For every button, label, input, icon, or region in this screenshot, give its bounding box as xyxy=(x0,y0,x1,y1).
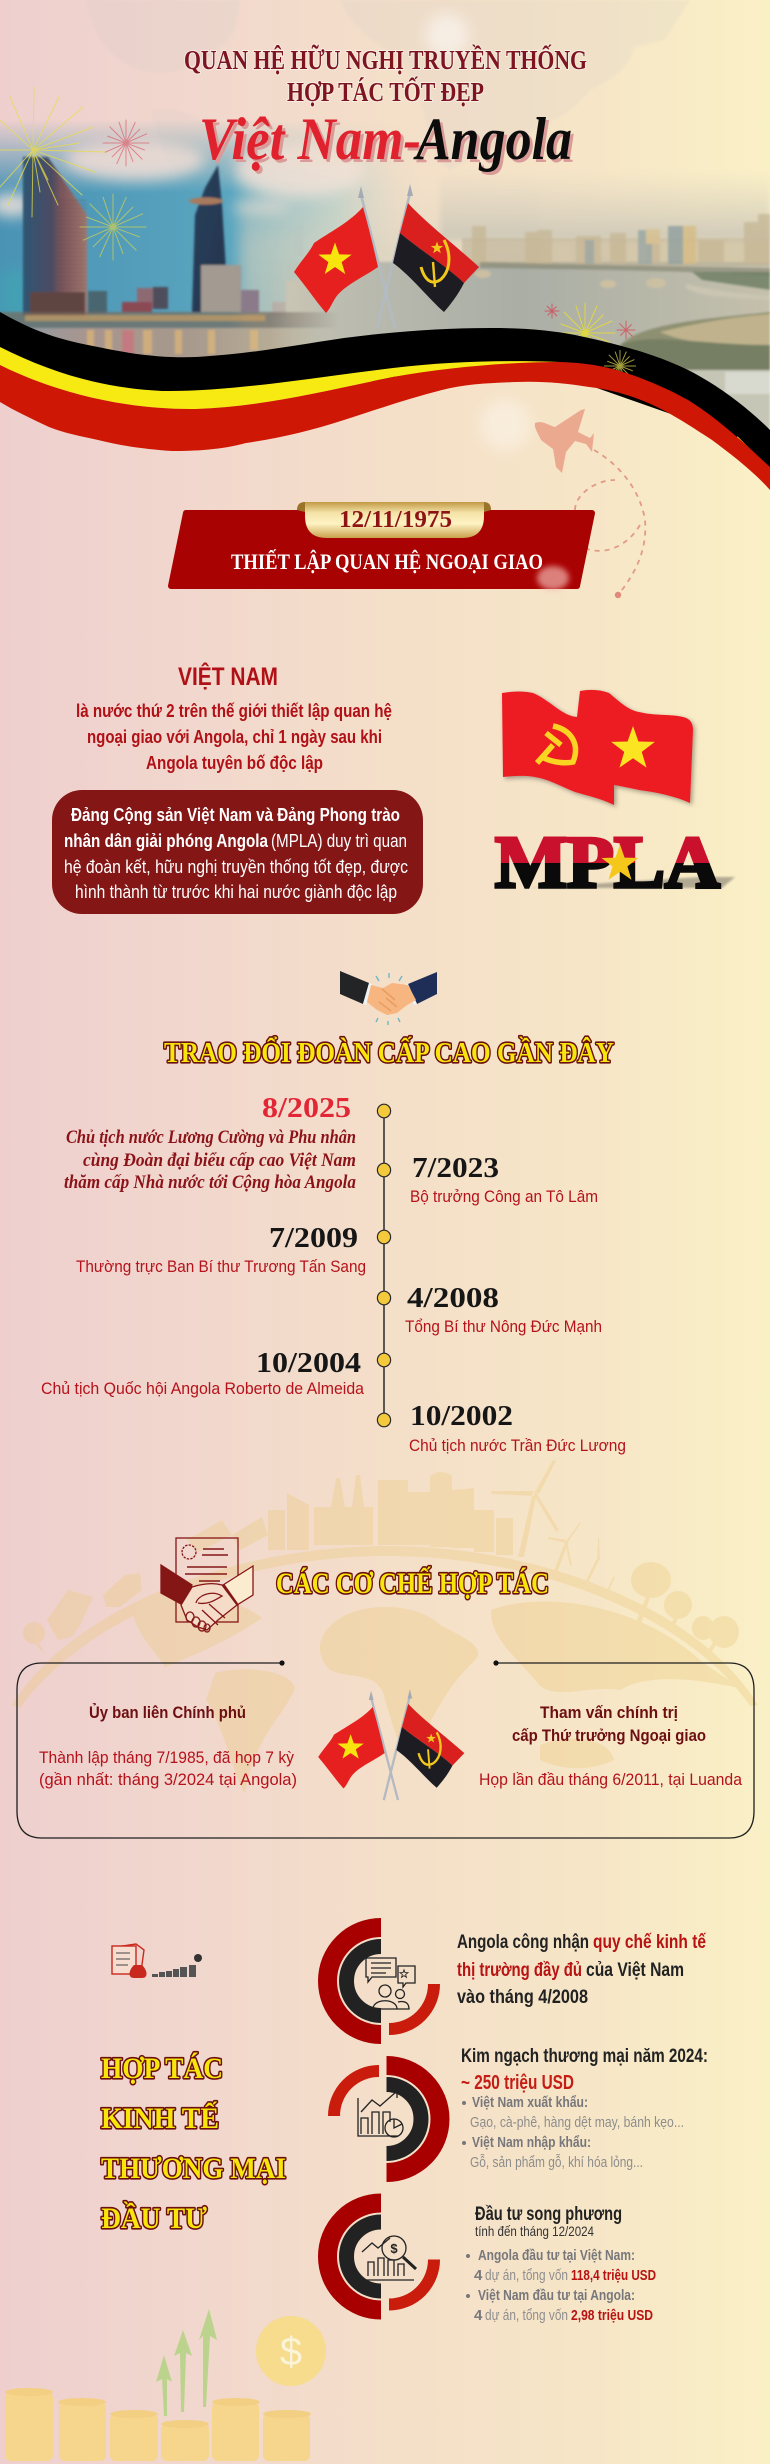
text block: bilateral investment: Đầu tư song phương xyxy=(475,2204,622,2225)
text block: Viet Nam: Angola tuyên bố độc lập xyxy=(146,753,323,773)
entry: 7/2023: 7/2023 xyxy=(412,1152,499,1184)
icon: contract and handshake xyxy=(161,1538,253,1632)
right mechanism text: Tham vấn chính trị xyxy=(540,1703,678,1722)
heading: cooperation mechanisms: CÁC CƠ CHẾ HỢP TÁC xyxy=(276,1566,549,1600)
right mechanism text: Họp lần đầu tháng 6/2011, tại Luanda xyxy=(479,1770,742,1789)
background coins and growth arrows: $ xyxy=(280,2330,302,2374)
entry: 8/2025: 8/2025 xyxy=(262,1092,351,1124)
gold tab xyxy=(297,502,491,512)
text block: market economy status: của Việt Nam xyxy=(586,1960,684,1981)
house xyxy=(47,1590,93,1640)
heading: economy, trade, investment xyxy=(101,2052,286,2235)
red band xyxy=(0,362,770,490)
title: Việt Nam- xyxy=(199,106,421,172)
panel: cooperation mechanisms xyxy=(17,1660,754,1838)
sky over Luanda xyxy=(439,186,770,241)
text block: market economy status: quy chế kinh tế xyxy=(593,1932,706,1953)
text block: bilateral investment xyxy=(466,2204,656,2324)
fireworks xyxy=(0,87,635,363)
skyline Ho Chi Minh xyxy=(0,157,340,368)
text block: market economy status: Angola công nhận xyxy=(457,1932,589,1953)
entry: 10/2004: 10/2004 xyxy=(256,1347,361,1379)
icon: handshake xyxy=(340,971,437,1025)
banner label: THIẾT LẬP QUAN HỆ NGOẠI GIAO xyxy=(231,549,543,574)
text block: bilateral investment: Việt Nam đầu tư tại Angola: xyxy=(478,2287,635,2304)
title xyxy=(184,44,587,175)
title: Việt Nam- xyxy=(202,109,424,175)
panel: party relations xyxy=(52,790,423,914)
sky over Ho Chi Minh City xyxy=(0,123,394,329)
decorative wave: black yellow red ribbon xyxy=(0,312,770,490)
timeline axis xyxy=(383,1111,385,1420)
left mechanism text xyxy=(39,1703,297,1789)
title: QUAN HỆ HỮU NGHỊ TRUYỀN THỐNG xyxy=(184,44,587,75)
timeline xyxy=(41,1092,626,1455)
icon: airplane and dashed route xyxy=(535,409,645,598)
text block: market economy status: vào tháng 4/2008 xyxy=(457,1987,588,2008)
entry: 4/2008 xyxy=(405,1282,602,1336)
title: HỢP TÁC TỐT ĐẸP xyxy=(287,76,484,107)
heading: economy, trade, investment: ĐẦU TƯ xyxy=(101,2201,207,2235)
ring icon: market economy status xyxy=(328,1928,434,2034)
left mechanism text: (gần nhất: tháng 3/2024 tại Angola) xyxy=(39,1770,297,1789)
left mechanism text: Ủy ban liên Chính phủ xyxy=(89,1703,246,1722)
panel: party relations: hệ đoàn kết, hữu nghị truyền thống tốt đẹp, được xyxy=(64,857,408,877)
car xyxy=(103,1573,142,1607)
globe arc xyxy=(12,1546,758,1708)
text block: bilateral investment: tính đến tháng 12/2024 xyxy=(475,2223,594,2239)
text block: Viet Nam xyxy=(76,661,392,773)
text block: Viet Nam: ngoại giao với Angola, chỉ 1 ngày sau khi xyxy=(87,727,382,747)
text block: trade turnover xyxy=(461,2046,708,2171)
yellow sliver on right edge xyxy=(737,437,770,470)
entry: 4/2008: Tổng Bí thư Nông Đức Mạnh xyxy=(405,1317,602,1336)
heading: economy, trade, investment: THƯƠNG MẠI xyxy=(101,2152,286,2185)
crossed flags xyxy=(318,1689,464,1800)
entry: 10/2002 xyxy=(409,1400,626,1455)
entry: 10/2002: Chủ tịch nước Trần Đức Lương xyxy=(409,1436,626,1455)
entry: 7/2023: Bộ trưởng Công an Tô Lâm xyxy=(410,1187,598,1206)
sparkle at top xyxy=(425,13,469,57)
text block: bilateral investment: dự án, tổng vốn xyxy=(485,2307,568,2324)
text block: market economy status: thị trường đầy đủ xyxy=(457,1960,582,1981)
entry: 8/2025: thăm cấp Nhà nước tới Cộng hòa Angola xyxy=(64,1172,356,1193)
text block: Viet Nam: là nước thứ 2 trên thế giới thiết lập quan hệ xyxy=(76,701,392,721)
icon: party flag xyxy=(502,690,693,805)
hero photo: city skylines xyxy=(0,123,770,430)
text block: bilateral investment: 2,98 triệu USD xyxy=(571,2307,653,2324)
entry: 8/2025 xyxy=(64,1092,356,1193)
text block: bilateral investment: dự án, tổng vốn xyxy=(485,2267,568,2284)
heading: economy, trade, investment: KINH TẾ xyxy=(101,2101,219,2135)
black band xyxy=(0,312,770,480)
icon: finance documents and growth bars xyxy=(112,1944,202,1978)
wind turbines xyxy=(491,1460,615,1597)
entry: 10/2004 xyxy=(41,1347,365,1398)
panel: date banner xyxy=(171,502,592,590)
panel: party relations: nhân dân giải phóng Angola xyxy=(64,831,269,851)
entry: 7/2009 xyxy=(76,1222,366,1276)
panel: party relations: (MPLA) duy trì quan xyxy=(271,831,407,851)
text block: trade turnover: ~ 250 triệu USD xyxy=(461,2072,574,2094)
entry: 4/2008: 4/2008 xyxy=(407,1282,499,1314)
right mechanism text xyxy=(479,1703,742,1789)
sparkle below wave xyxy=(479,399,531,451)
background globe and city illustration xyxy=(12,1460,758,1793)
text block: Viet Nam: VIỆT NAM xyxy=(178,661,278,691)
icon: MPLA logo: MPLA xyxy=(495,822,720,904)
text block: trade turnover: Gỗ, sản phẩm gỗ, khí hóa lỏng... xyxy=(470,2154,643,2171)
text block: bilateral investment: 4 xyxy=(474,2267,483,2284)
crossed flags of Vietnam and Angola xyxy=(294,184,479,328)
panel: party relations: hình thành từ trước khi hai nước giành độc lập xyxy=(75,882,397,902)
text block: trade turnover: Kim ngạch thương mại năm 2024: xyxy=(461,2046,708,2067)
yellow band xyxy=(0,347,560,409)
title: Angola xyxy=(413,106,572,172)
ring icon: bilateral investment: $ xyxy=(390,2241,398,2256)
right mechanism text: cấp Thứ trưởng Ngoại giao xyxy=(512,1726,706,1745)
background coins and growth arrows xyxy=(5,2309,326,2461)
entry: 7/2009: Thường trực Ban Bí thư Trương Tấn Sang xyxy=(76,1257,366,1276)
entry: 8/2025: cùng Đoàn đại biểu cấp cao Việt Nam xyxy=(83,1150,356,1171)
entry: 10/2002: 10/2002 xyxy=(410,1400,513,1432)
entry: 7/2009: 7/2009 xyxy=(269,1222,358,1254)
left mechanism text: Thành lập tháng 7/1985, đã họp 7 kỳ xyxy=(39,1748,294,1767)
text block: bilateral investment: 4 xyxy=(474,2307,483,2324)
entry: 10/2004: Chủ tịch Quốc hội Angola Roberto de Almeida xyxy=(41,1379,365,1398)
text block: trade turnover: Gạo, cà-phê, hàng dệt may, bánh kẹo... xyxy=(470,2114,684,2131)
panel: party relations: Đảng Cộng sản Việt Nam và Đảng Phong trào xyxy=(71,805,400,825)
skyline Luanda xyxy=(279,214,770,430)
text block: bilateral investment: Angola đầu tư tại Việt Nam: xyxy=(478,2247,635,2264)
frame xyxy=(17,1663,754,1838)
trees xyxy=(631,1562,671,1598)
text block: trade turnover: Việt Nam xuất khẩu: xyxy=(472,2094,588,2111)
ring icon: bilateral investment xyxy=(328,2203,434,2310)
ring icon: trade turnover xyxy=(334,2066,440,2172)
continents xyxy=(320,1607,478,1752)
heading: economy, trade, investment: HỢP TÁC xyxy=(101,2052,223,2085)
red ribbon xyxy=(171,513,592,586)
factories and buildings xyxy=(268,1472,513,1555)
city haze centre xyxy=(232,188,462,328)
entry: 8/2025: Chủ tịch nước Lương Cường và Phu nhân xyxy=(66,1127,356,1148)
entry: 7/2023 xyxy=(410,1152,598,1206)
date: 12/11/1975 xyxy=(339,507,452,533)
text block: bilateral investment: 118,4 triệu USD xyxy=(571,2267,656,2284)
heading: recent high-level exchanges: TRAO ĐỔI ĐOÀN CẤP CAO GẦN ĐÂY xyxy=(164,1035,614,1069)
title: Angola xyxy=(416,109,575,175)
text block: trade turnover: Việt Nam nhập khẩu: xyxy=(472,2134,591,2151)
text block: market economy status xyxy=(457,1932,706,2008)
solar panels xyxy=(187,1517,268,1552)
background world map at top xyxy=(85,0,690,312)
